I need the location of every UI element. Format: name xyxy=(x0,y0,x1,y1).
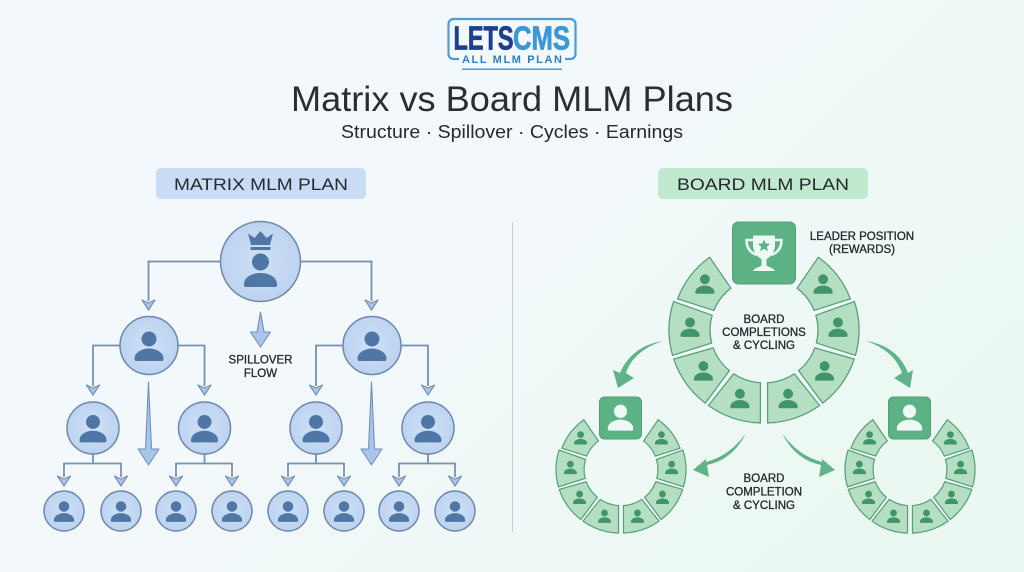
panel: board right ring xyxy=(845,418,975,536)
heading: matrix: MATRIX MLM PLAN xyxy=(174,175,348,194)
label: spillover flow: FLOW xyxy=(244,368,277,380)
label: board completions: & CYCLING xyxy=(733,340,795,352)
arrow: lower right xyxy=(782,433,835,477)
level 4 nodes xyxy=(44,491,475,531)
label: board completions: COMPLETIONS xyxy=(722,327,806,339)
label: board completion: & CYCLING xyxy=(733,500,795,512)
label: spillover flow: SPILLOVER xyxy=(229,354,292,366)
title: Matrix vs Board MLM Plans xyxy=(291,80,733,119)
ring segments xyxy=(669,255,859,427)
heading: board xyxy=(658,168,868,199)
logo: CMS xyxy=(513,20,570,56)
arrow: lower left xyxy=(693,433,746,477)
level 2 nodes xyxy=(120,316,401,374)
arrow: main to right board xyxy=(866,341,913,388)
panel: matrix tree xyxy=(44,222,475,531)
logo: LETS xyxy=(454,20,514,56)
label: board completion: BOARD xyxy=(744,473,784,485)
root node with crown xyxy=(220,222,300,302)
logo: ALL MLM PLAN xyxy=(462,54,562,66)
label: leader position: (REWARDS) xyxy=(829,244,895,256)
connectors xyxy=(64,262,455,477)
heading: matrix xyxy=(156,168,366,199)
label: board completion: COMPLETION xyxy=(726,486,802,498)
level 3 nodes xyxy=(67,402,454,454)
spillover arrows xyxy=(138,312,382,465)
icon: right board leader xyxy=(888,397,930,439)
icon: left board leader xyxy=(600,397,642,439)
label: leader position: LEADER POSITION xyxy=(810,231,914,243)
ring members xyxy=(680,274,848,408)
logo xyxy=(448,19,576,70)
icon: trophy xyxy=(732,222,796,284)
panel: board left ring xyxy=(556,418,686,536)
label: board completions: BOARD xyxy=(744,314,784,326)
heading: board: BOARD MLM PLAN xyxy=(677,175,849,194)
arrowheads xyxy=(58,300,462,486)
panel: board main ring xyxy=(669,255,859,427)
subtitle: Structure · Spillover · Cycles · Earnings xyxy=(341,122,683,142)
arrow: main to left board xyxy=(613,341,663,388)
